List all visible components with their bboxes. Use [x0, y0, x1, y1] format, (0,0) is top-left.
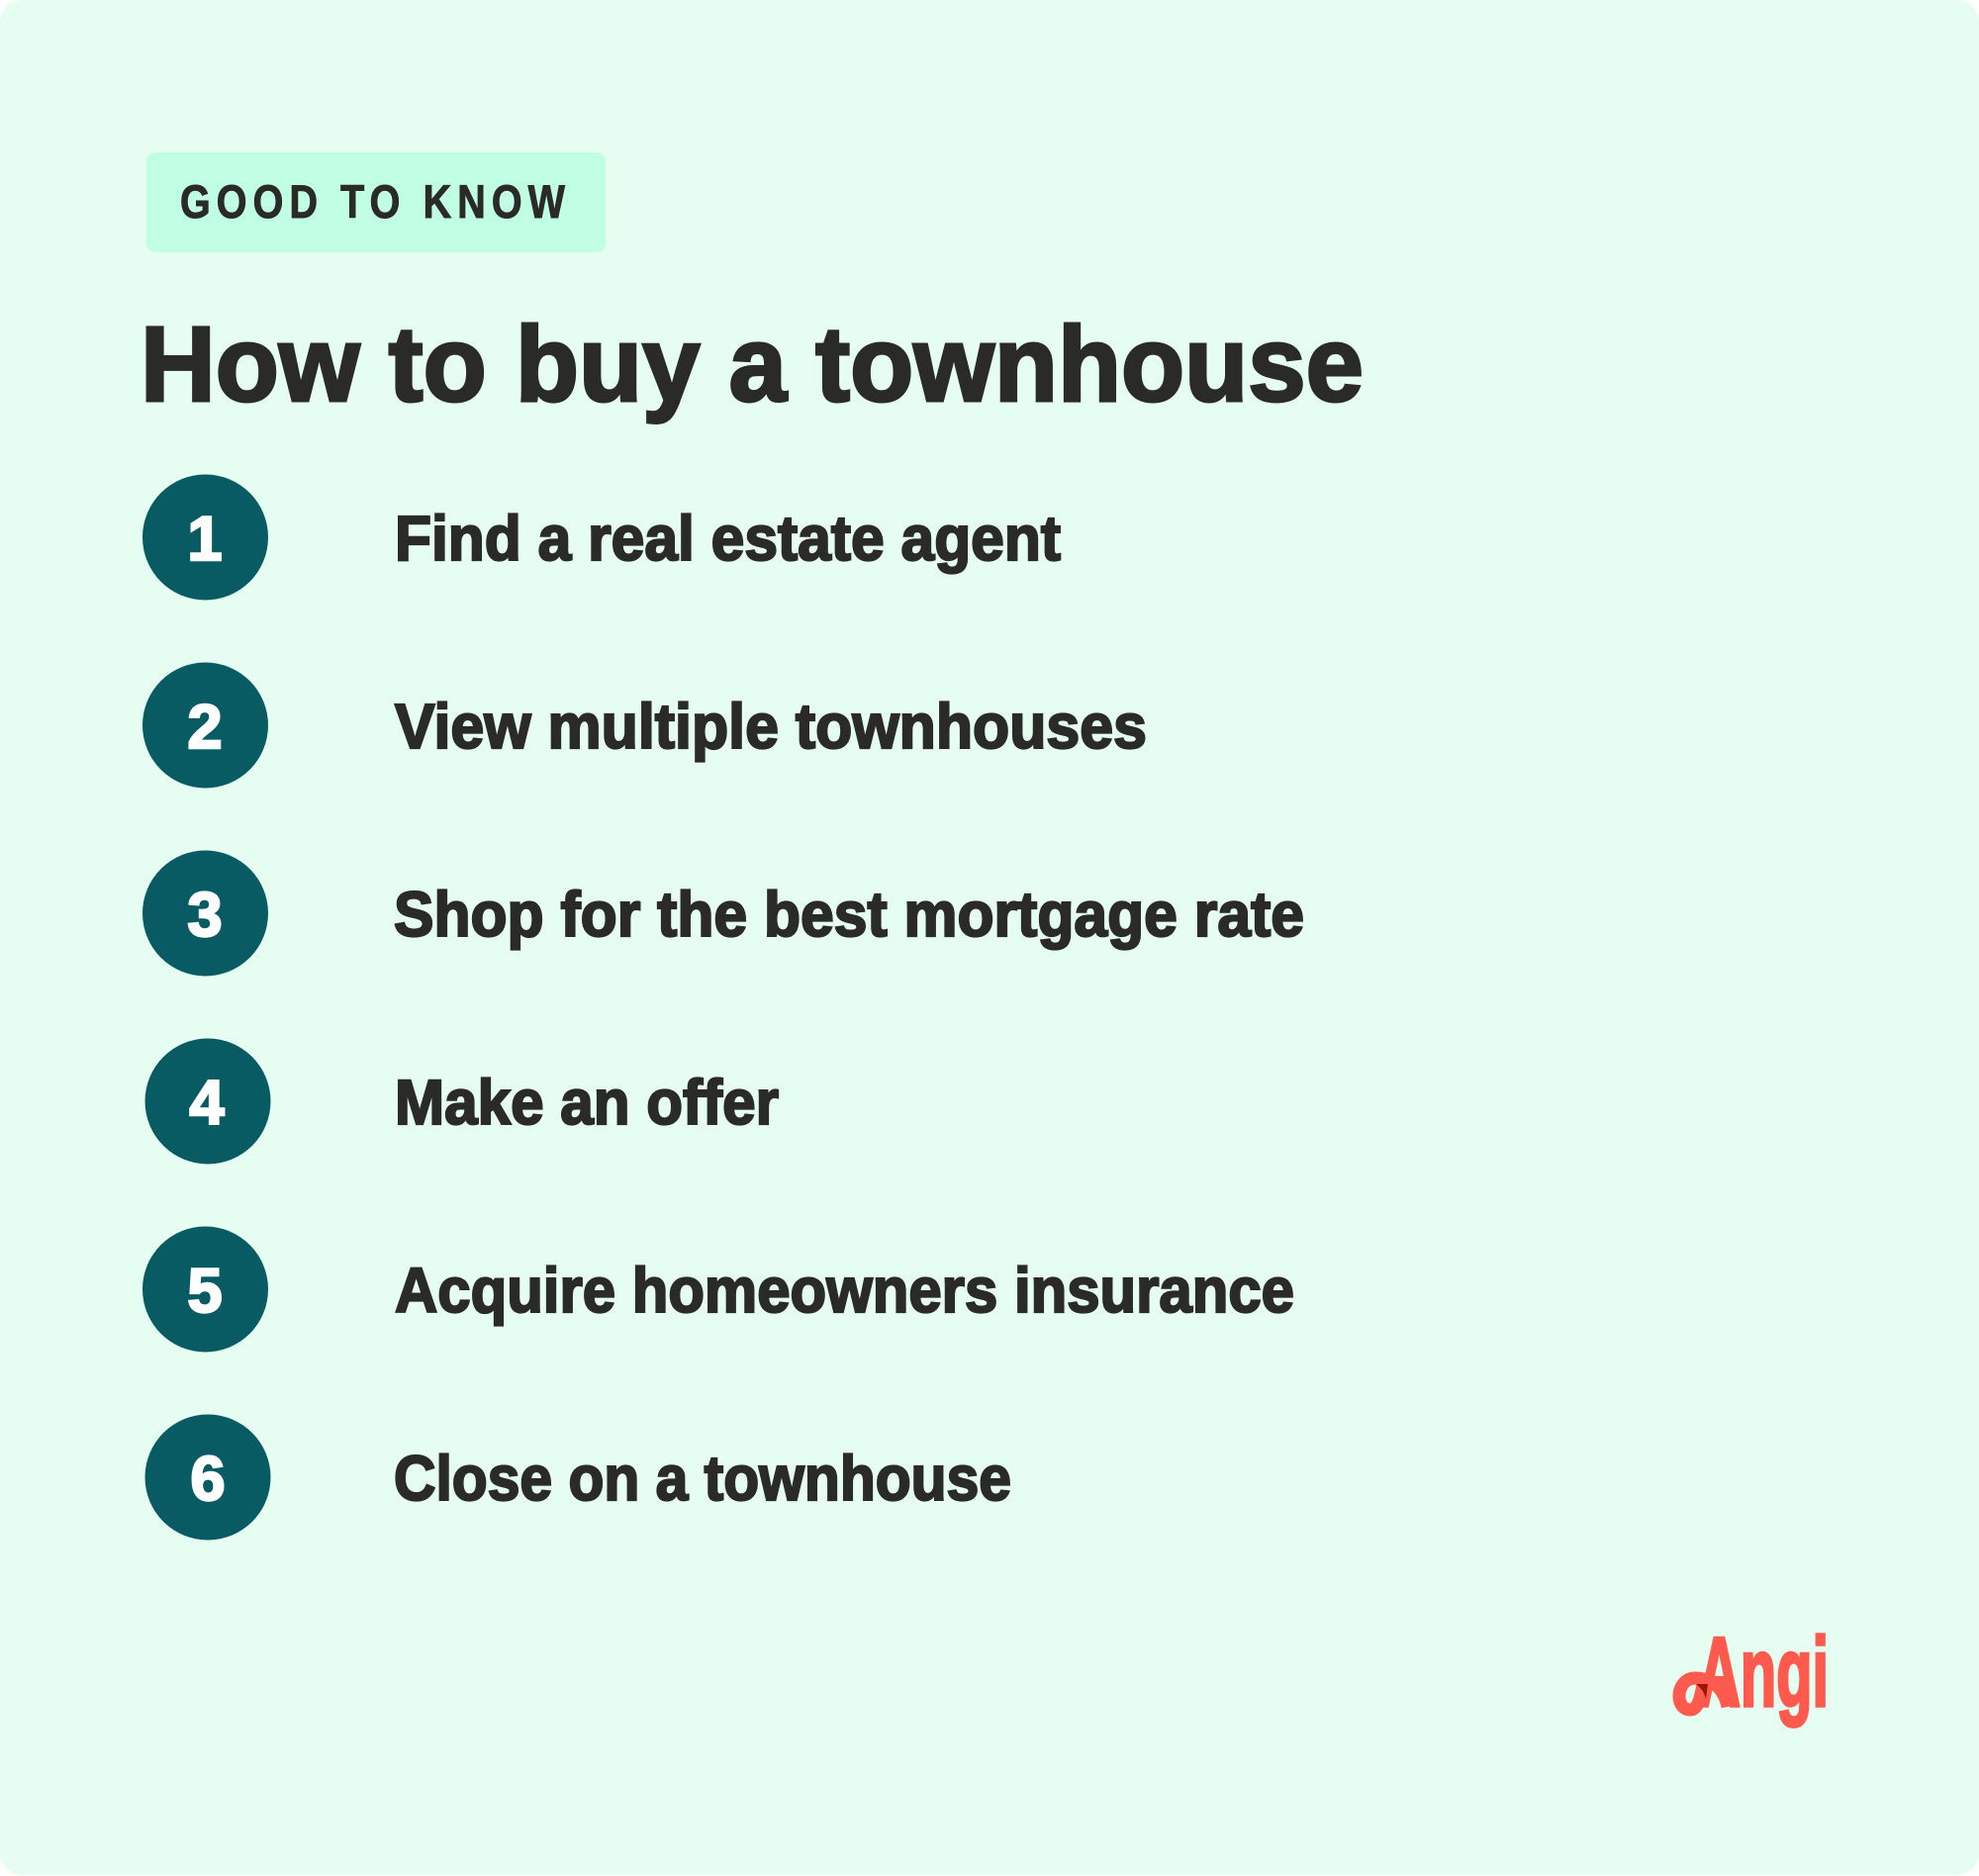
step 3: Shop for the best mortgage rate: [394, 879, 1304, 950]
step 3: [142, 851, 1304, 976]
step 4: [144, 1039, 779, 1164]
step 6: Close on a townhouse: [394, 1443, 1011, 1514]
step 5: 5: [187, 1257, 223, 1326]
step 1: 1: [187, 505, 223, 574]
step 5: [142, 1227, 1294, 1352]
step 2: 2: [187, 693, 223, 762]
logo: Angi: [1679, 1617, 1829, 1727]
step 1: Find a real estate agent: [395, 503, 1061, 574]
step 5: Acquire homeowners insurance: [395, 1255, 1294, 1326]
logo: Angi: Angi: [1698, 1617, 1829, 1727]
step 2: [142, 663, 1147, 788]
step 3: 3: [187, 881, 223, 950]
step 2: View multiple townhouses: [395, 691, 1147, 762]
title: How to buy a townhouse: [141, 304, 1364, 423]
step 6: 6: [190, 1445, 226, 1514]
step 1: [142, 475, 1061, 600]
badge: good to know: [146, 152, 606, 252]
step 4: Make an offer: [395, 1067, 779, 1138]
step 6: [144, 1415, 1011, 1540]
step 4: 4: [189, 1069, 225, 1138]
badge: good to know: GOOD TO KNOW: [180, 177, 565, 229]
